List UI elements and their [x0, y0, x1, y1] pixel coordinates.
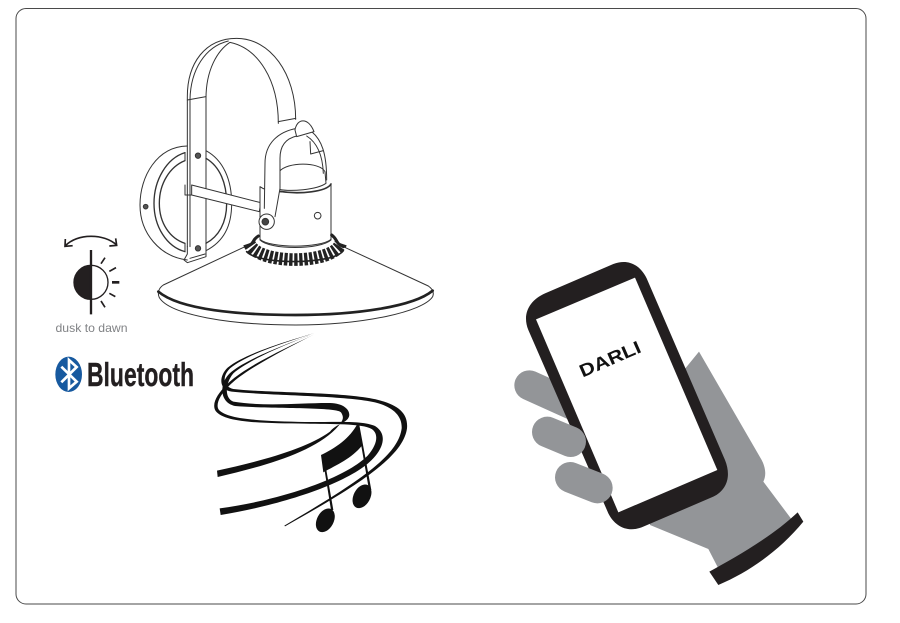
text: Bluetooth wordmark: Bluetooth — [87, 356, 194, 393]
illustration: music staff and notes — [214, 333, 407, 535]
lamp arm — [192, 185, 261, 212]
label: dusk to dawn: dusk to dawn — [56, 321, 128, 335]
lamp wall plate — [140, 146, 232, 260]
lamp finned ring — [247, 235, 343, 262]
icon: Bluetooth badge — [55, 357, 82, 392]
illustration: hand holding phone — [526, 262, 803, 585]
phone body — [526, 262, 728, 529]
illustration: wall lamp — [140, 38, 433, 325]
sleeve cuff — [709, 512, 803, 585]
icon: dusk to dawn sensor — [65, 236, 119, 314]
lamp shade — [158, 247, 433, 325]
lamp handle and cap — [259, 121, 327, 229]
hand back — [633, 352, 793, 572]
icon: half-filled circle — [74, 250, 108, 314]
music notes — [312, 423, 375, 535]
finger behind phone — [529, 385, 577, 407]
music staff swooshes — [214, 333, 407, 526]
icon: sun rays — [101, 258, 116, 307]
logo: Bluetooth — [55, 356, 194, 393]
lamp bracket strap — [184, 38, 296, 263]
icon: rotation arrow — [65, 236, 117, 246]
phone screen — [536, 278, 717, 512]
lamp body cylinder — [260, 164, 331, 247]
fingers over phone — [547, 432, 597, 488]
text: DARLI app name: DARLI — [576, 337, 644, 381]
